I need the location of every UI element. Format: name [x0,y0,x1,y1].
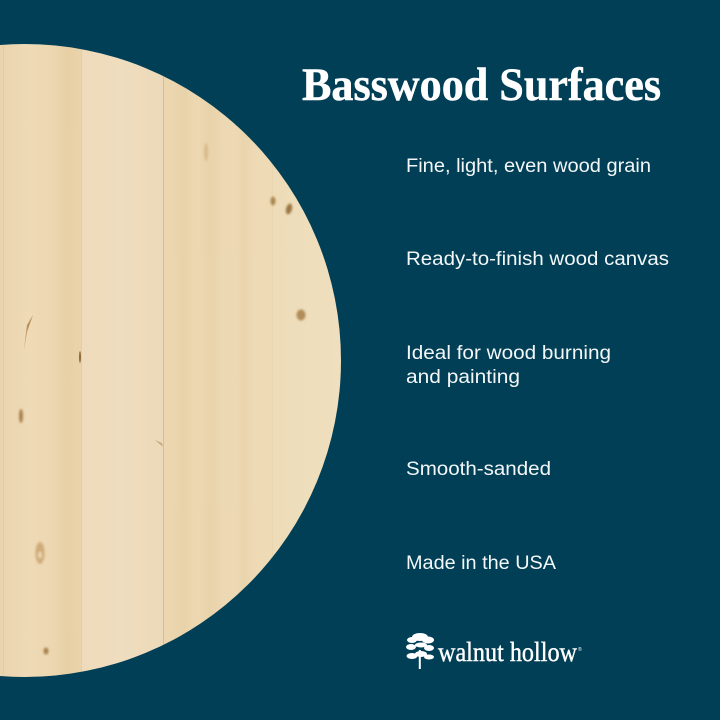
wood knots [19,143,306,654]
feature: grain: Fine, light, even wood grain [406,156,651,177]
feature: canvas: Ready-to-finish wood canvas [406,249,669,270]
feature: uses: and painting [406,367,520,388]
title: Basswood Surfaces [302,59,661,111]
feature: uses [406,343,611,388]
icon: tree [406,633,434,669]
wood grain shading [60,40,249,680]
logo wordmark: walnut hollow [438,637,577,667]
registered mark: ® [578,646,582,653]
feature: sanded: Smooth-sanded [406,459,551,480]
feature: uses: Ideal for wood burning [406,343,611,364]
logo: walnut hollow [406,633,582,669]
feature: origin: Made in the USA [406,553,556,574]
feature list [406,156,669,574]
wood round panel [0,40,342,680]
